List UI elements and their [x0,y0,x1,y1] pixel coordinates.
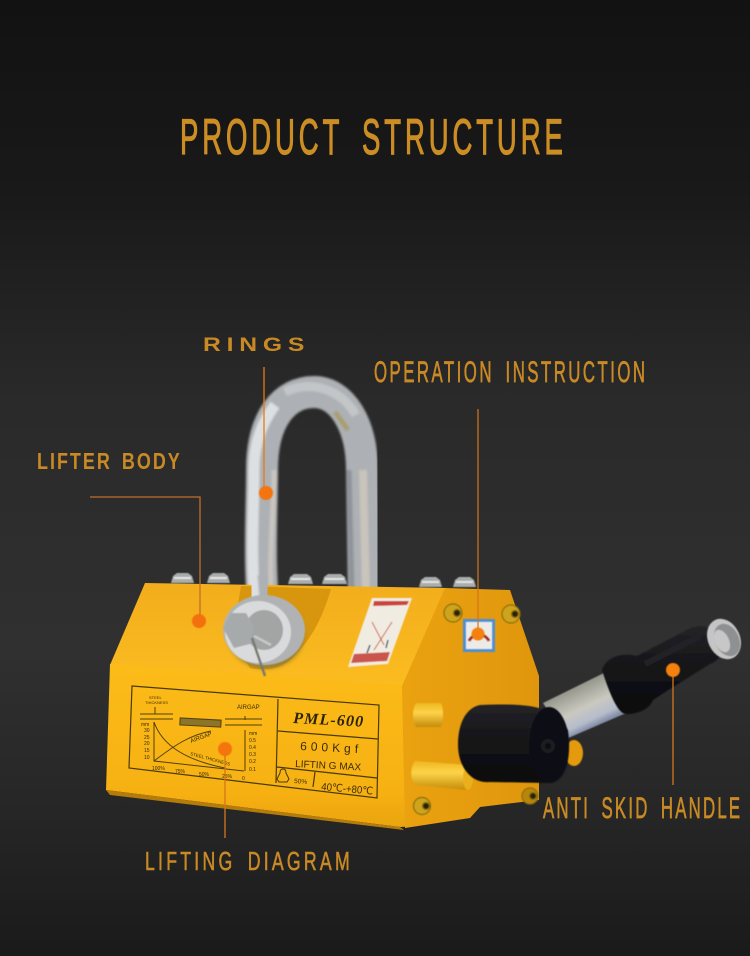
diagram panel: 0.2 [249,759,256,765]
shackle ring [253,387,366,620]
diagram panel: 0.4 [249,745,256,751]
diagram panel: 0.3 [249,752,256,758]
diagram panel: mm [249,731,257,737]
diagram panel: STEEL THICKNESS [190,751,231,767]
diagram panel [129,686,379,798]
temperature: 40℃-+80℃ [321,781,374,798]
diagram panel: 75% [175,769,186,775]
duty: 50% [294,778,308,786]
ring slot [232,586,331,669]
label: operation instruction: OPERATION INSTRUCTION [374,356,645,389]
diagram panel: 0.5 [249,738,256,744]
right side face [402,588,539,828]
diagram panel: 25% [222,774,233,780]
diagram panel: 0 [242,776,245,782]
black rubber cap [458,704,569,783]
diagram panel: STEEL [149,695,162,700]
chart: airgap curves [140,707,262,771]
shackle eye and pin [223,595,305,676]
top sloped face [110,583,447,686]
diagram panel: THICKNESS [145,700,168,705]
label: operation instruction [374,356,645,640]
diagram panel: 0.1 [249,767,256,773]
handle tube [543,667,640,739]
diagram panel: mm [141,722,149,728]
product: lifting magnet [106,387,747,830]
diagram panel: 50% [199,772,210,778]
diagram panel: 10 [144,755,150,761]
lifting max: LIFTIN G MAX [295,759,362,773]
title: PRODUCT STRUCTURE [180,108,563,165]
diagram panel: 15 [144,748,150,754]
shackle lower legs [253,575,266,622]
anti skid grip [602,626,722,714]
label: rings: RINGS [203,334,304,355]
warning sticker [348,598,412,667]
diagram panel: AIRGAP [190,731,213,745]
diagram panel: 30 [144,728,150,734]
model label: PML-600 [292,710,364,731]
label: anti skid handle [543,663,740,825]
side bolts [414,604,538,814]
label: lifter body: LIFTER BODY [37,449,180,475]
handle end knob [701,613,747,665]
label: lifter body [37,449,206,628]
label: lifting diagram: LIFTING DIAGRAM [145,847,350,876]
label: anti skid handle: ANTI SKID HANDLE [543,792,740,825]
diagram panel: 20 [144,741,150,747]
diagram panel: 25 [144,735,150,741]
diagram panel: AIRGAP [237,705,260,711]
diagram panel: 100% [152,766,165,772]
capacity: 600Kgf [300,739,359,756]
bolts on top [171,573,476,587]
front face [106,664,420,827]
locking pins [411,703,583,790]
label: lifting diagram [145,742,350,876]
instruction sticker [463,619,495,652]
label: rings [203,334,304,500]
